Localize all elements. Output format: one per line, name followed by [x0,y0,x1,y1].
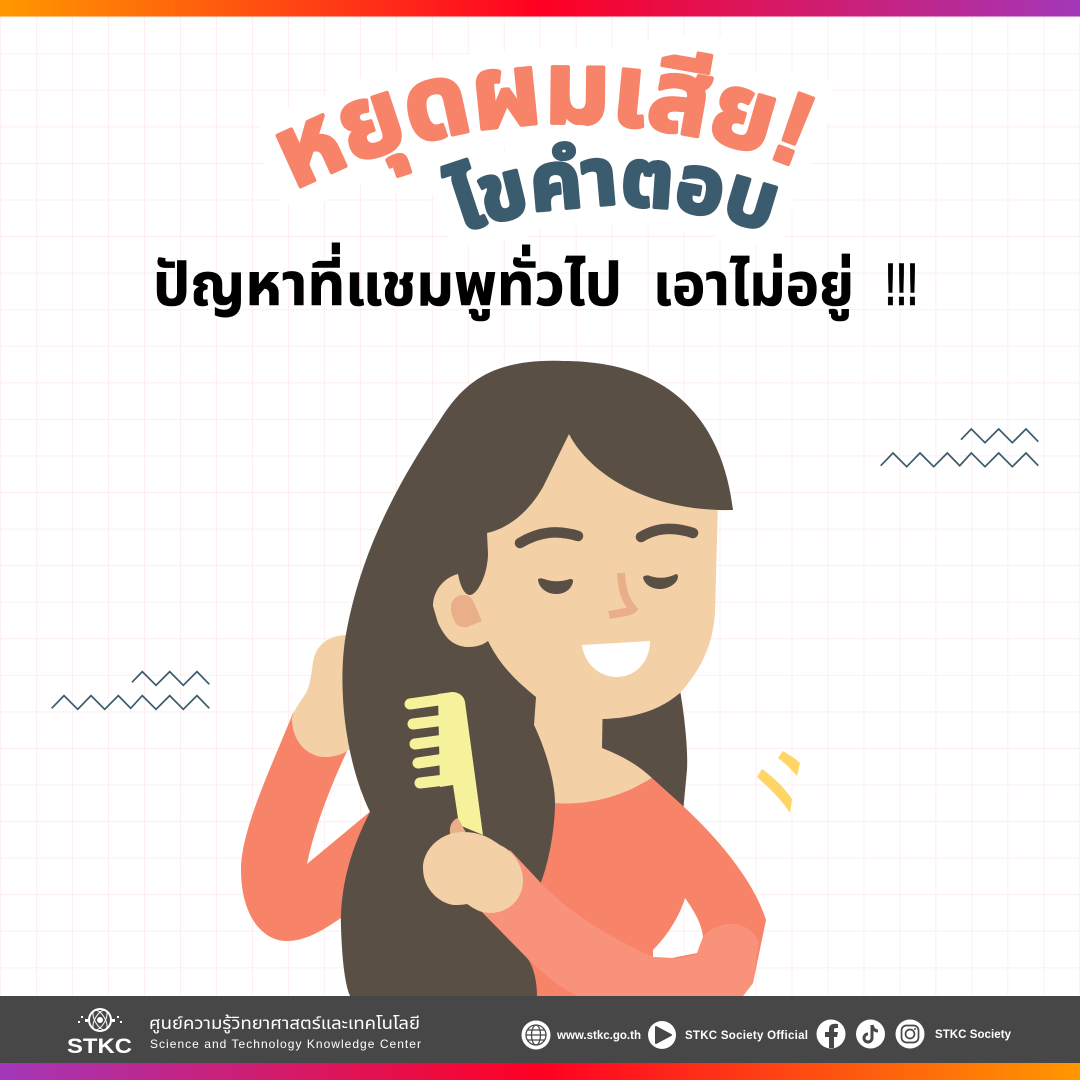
lower arm sleeve [475,850,759,996]
zigzag decoration right [881,429,1038,467]
title: curved headline line 1: หยุดผมเสีย! [260,36,831,204]
subtitle [153,242,918,321]
footer logo: STKC [67,1008,132,1058]
nose [609,573,633,615]
top gradient bar [0,0,1080,16]
footer organisation name English: Science and Technology Knowledge Center [150,1037,421,1051]
bottom gradient bar [0,1063,1080,1080]
instagram name: STKC Society [935,1029,1012,1041]
subtitle: เอาไม่อยู่ [653,251,854,321]
title: curved headline line 2: ไขคำตอบ [428,125,794,246]
back hair right [600,690,687,812]
left eye [538,578,573,594]
icon: facebook [816,1020,846,1048]
finger behind comb [450,818,470,840]
smile [582,641,650,677]
website: www.stkc.go.th [556,1030,641,1042]
right eye [643,574,678,589]
logo atom icon [78,1008,122,1032]
icon: instagram [896,1020,924,1048]
icon: tiktok [856,1020,885,1048]
subtitle: !!! [885,251,918,318]
left eyebrow [520,532,578,543]
raised hand [292,635,352,757]
ear inner [451,595,482,627]
face and ear [425,420,718,719]
icon: globe [522,1020,550,1050]
zigzag decoration left [52,672,209,709]
illustration: woman combing hair [241,361,766,996]
right eyebrow [641,529,693,537]
icon: play [648,1021,676,1049]
subtitle: ปัญหาที่แชมพูทั่วไป [153,242,622,321]
footer organisation name Thai: ศูนย์ความรู้วิทยาศาสตร์และเทคโนโลยี [149,1013,420,1035]
front hair [341,361,733,996]
logo wordmark: STKC [67,1035,132,1058]
hand holding comb [423,832,523,913]
sweater torso [520,778,766,996]
neck and chest [530,680,652,805]
footer bar [0,996,1080,1063]
comb [410,692,483,835]
youtube name: STKC Society Official [685,1030,808,1042]
left arm sleeve [241,700,372,941]
icon: yellow sparkle strokes [757,751,800,813]
